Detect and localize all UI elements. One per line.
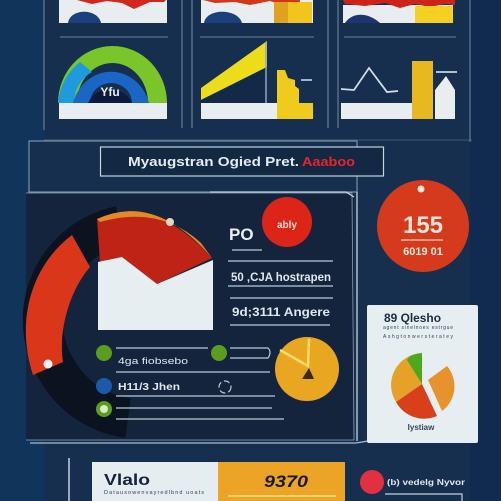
status dots bbox=[96, 345, 227, 417]
panel: main dashboard bbox=[26, 192, 368, 443]
panel: bottom orange card bbox=[218, 462, 345, 501]
stat row 1: 50 ,CJA hostrapen bbox=[231, 270, 331, 284]
orange value: 9370 bbox=[264, 472, 309, 491]
stat row 2: 9d;3111 Angere bbox=[232, 305, 330, 319]
gauge label: Yfu bbox=[100, 85, 120, 99]
red badge small: ably bbox=[277, 220, 297, 231]
chart: yellow area and bars bbox=[201, 41, 313, 119]
panel: pie card bbox=[367, 305, 478, 443]
gauge legend strip bbox=[59, 103, 167, 119]
pie caption: Iystiaw bbox=[408, 423, 435, 432]
yellow dial bbox=[275, 337, 339, 401]
panel: bottom white card bbox=[92, 462, 218, 501]
card heading: 89 Qlesho bbox=[384, 311, 441, 325]
panel: pie card: Ashgtonwersteratey bbox=[383, 334, 454, 340]
panel: top left chart bbox=[59, 0, 167, 23]
bottom vertical rule bbox=[68, 458, 70, 501]
title highlight: Aaaboo bbox=[302, 154, 355, 169]
chart: big donut bbox=[26, 211, 213, 418]
red badge small bbox=[262, 197, 312, 247]
panel: top right chart bbox=[343, 0, 455, 23]
bottom legend: (b) vedelg Nyvor bbox=[387, 477, 466, 487]
badge caption: 6019 01 bbox=[403, 246, 443, 258]
chart: gauge bbox=[58, 46, 167, 119]
chart: pie bbox=[391, 353, 454, 419]
row label 1: 4ga fiobsebo bbox=[118, 356, 188, 366]
heading PO: PO bbox=[229, 225, 254, 244]
title banner bbox=[29, 141, 384, 192]
panel: top middle chart bbox=[201, 0, 313, 23]
card text: Datausowenvayredlbnd uoats bbox=[104, 490, 204, 496]
card title: Vlalo bbox=[104, 472, 150, 489]
title text: Myaugstran Ogied Pret. bbox=[128, 154, 299, 169]
row label 2: H11/3 Jhen bbox=[118, 382, 180, 393]
bottom legend bbox=[360, 470, 466, 501]
chart: line and bars bbox=[341, 61, 457, 119]
card body: agent sinelnoes estrgue bbox=[383, 325, 453, 331]
badge value: 155 bbox=[403, 212, 443, 239]
red stat badge bbox=[377, 180, 469, 272]
